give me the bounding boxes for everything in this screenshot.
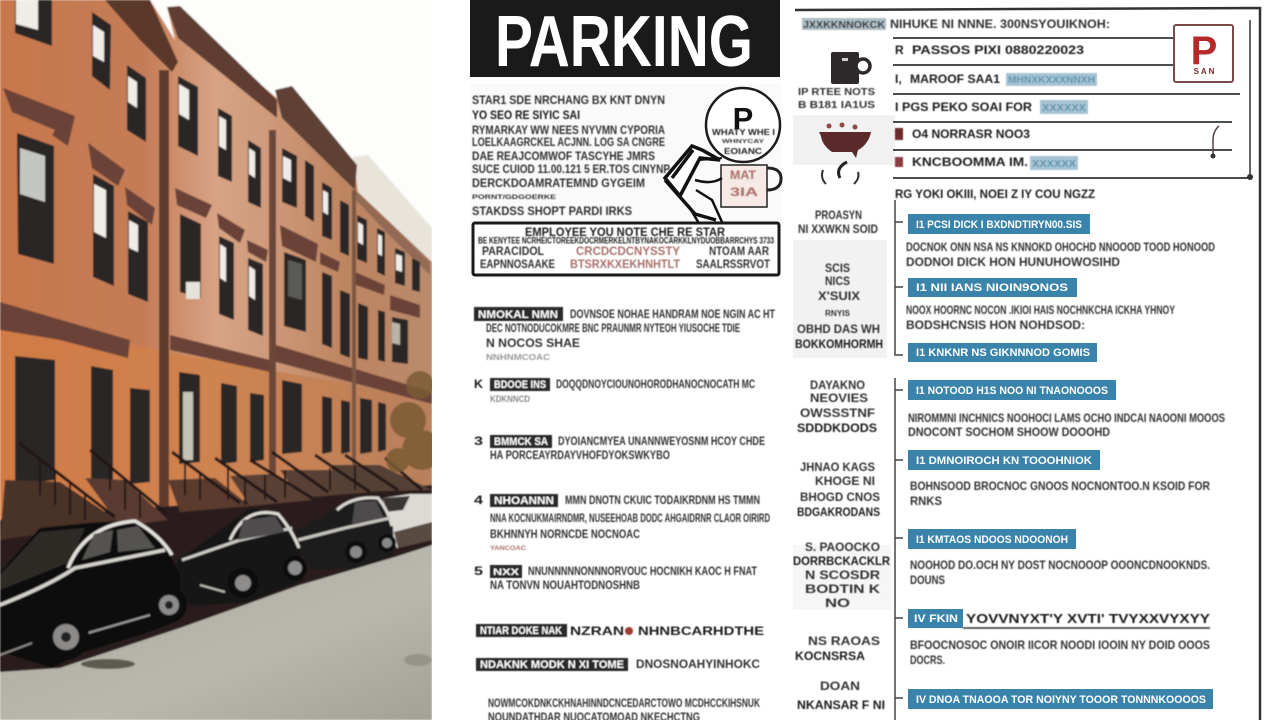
label block C: DAYAKNO [810, 380, 865, 392]
item 4: 4 [474, 493, 483, 507]
bold rule line: NZRAN [570, 624, 624, 638]
intro paragraph: DERCKDOAMRATEMND GYGEIM [472, 178, 645, 190]
closing note [488, 698, 760, 720]
item 4: NHOANNN [494, 495, 554, 507]
info box: PARACIDOL [482, 246, 544, 258]
item 1: NMOKAL NMN [478, 309, 558, 321]
panel: middle icon column [793, 52, 895, 712]
label block E: BODTIN K [805, 584, 881, 596]
step 5: RNKS [910, 496, 942, 508]
label block F: DOAN [820, 681, 860, 693]
label block E: S. PAOOCKO [805, 542, 880, 554]
item 2 [474, 377, 755, 404]
intro paragraph: SUCE CUIOD 11.00.121 5 ER.TOS CINYNP [472, 164, 670, 176]
item 1 [474, 307, 775, 362]
item 5: NXX [493, 567, 519, 577]
item 3: DYOIANCMYEA UNANNWEYOSNM HCOY CHDE [558, 436, 765, 448]
info box: SAALRSSRVOT [696, 259, 770, 271]
label block B: NICS [825, 276, 850, 288]
item 5 [474, 564, 757, 592]
label block A: NI XXWKN SOID [798, 224, 878, 236]
item 1: DEC NOTNODUCOKMRE BNC PRAUNMR NYTEOH YIUSOCHE TDIE [486, 323, 740, 335]
checklist rows: O4 NORRASR NOO3 [912, 127, 1030, 141]
step 6: DOUNS [910, 575, 945, 587]
item 3 [474, 434, 765, 462]
checklist header: JXXKKNNOKCK [803, 20, 886, 31]
intro paragraph: LOELKAAGRCKEL ACJNN. LOG SA CNGRE [472, 137, 665, 149]
item 2: DOQQDNOYCIOUNOHORODHANOCNOCATH MC [556, 379, 755, 391]
checklist rows: KNCBOOMMA IM. [912, 155, 1028, 169]
info box: NTOAM AAR [709, 246, 770, 258]
label block B: OBHD DAS WH [797, 324, 880, 336]
item 4: MMN DNOTN CKUIC TODAIKRDNM HS TMMN [565, 495, 760, 507]
item 5: 5 [474, 564, 483, 578]
item 4: YANCOAC [490, 546, 527, 552]
item 2: K [474, 377, 483, 391]
icon: parking sign held by a hand: WHNYCAY [722, 139, 765, 145]
item 2: KDKNNCD [490, 394, 530, 404]
photo: brownstone street with parked cars [0, 0, 442, 720]
step 4: DNOCONT SOCHOM SHOOW DOOOHD [908, 427, 1110, 439]
info box [473, 223, 779, 275]
step 1: I1 PCSI DICK I BXDNDTIRYN00.SIS [916, 219, 1082, 231]
intro paragraph: RYMARKAY WW NEES NYVMN CYPORIA [472, 125, 665, 137]
icon: parking sign held by a hand: WHATY WHE I [712, 127, 775, 137]
step 7: IV FKIN [914, 613, 958, 625]
label block B: RNYIS [825, 309, 851, 318]
windows [15, 0, 420, 485]
step 4 [908, 380, 1225, 439]
bold rule line: NHNBCARHDTHE [638, 624, 764, 638]
drain pipes [159, 70, 169, 510]
checklist rows: MHNXKXXXNNXH [1008, 75, 1095, 86]
road [0, 545, 432, 720]
label block E [793, 542, 890, 610]
icon: parking sign held by a hand: 3IA [730, 187, 758, 199]
bold rule line: NTIAR DOKE NAK [480, 625, 562, 637]
checklist rows: I PGS PEKO SOAI FOR [895, 100, 1032, 114]
small tick mark [1210, 126, 1219, 158]
label block B: BOKKOMHORMH [795, 337, 883, 351]
item 1: DOVNSOE NOHAE HANDRAM NOE NGIN AC HT [570, 309, 775, 321]
item 3: 3 [474, 434, 483, 448]
intro paragraph: PORNT/GDGOERKE [472, 195, 556, 201]
checklist rows: R [895, 43, 904, 57]
second rule line: DNOSNOAHYINHOKC [636, 659, 760, 671]
step 3 [908, 343, 1097, 362]
checklist rows: PASSOS PIXI 0880220023 [912, 43, 1084, 57]
intro paragraph: YO SEO RE SIYIC SAI [472, 108, 580, 122]
label block A: PROASYN [815, 210, 862, 222]
step 6: I1 KMTAOS NDOOS NDOONOH [916, 534, 1068, 546]
info box: EMPLOYEE YOU NOTE CHE RE STAR [525, 225, 725, 239]
step 7: DOCRS. [910, 655, 945, 667]
item 4: BKHNNYH NORNCDE NOCNOAC [490, 529, 640, 541]
label block D [797, 462, 880, 519]
step 7: BFOOCNOSOC ONOIR IICOR NOODI IOOIN NY DOID OOOS [910, 640, 1210, 652]
title banner: PARKING [495, 2, 753, 82]
icon: parking sign held by a hand: MAT [730, 170, 756, 182]
cornices [105, 0, 178, 72]
label block D: BHOGD CNOS [800, 492, 880, 504]
step 2: BODSHCNSIS HON NOHDSOD: [906, 320, 1085, 332]
icon: parking sign held by a hand: P [733, 101, 753, 136]
label block A: B B181 IA1US [798, 100, 875, 111]
label block F: KOCNSRSA [795, 649, 865, 663]
item 5: NA TONVN NOUAHTODNOSHNB [490, 580, 640, 592]
step 2: NOOX HOORNC NOCON .IKIOI HAIS NOCHNKCHA ICKHA YHNOY [906, 305, 1175, 317]
info box: EAPNNOSAAKE [480, 259, 555, 271]
label block C: SDDDKDODS [797, 421, 877, 435]
label block F [795, 636, 885, 712]
window lintels [0, 88, 432, 404]
bold rule line [476, 624, 764, 638]
item 3: BMMCK SA [494, 436, 548, 448]
step 1: DOCNOK ONN NSA NS KNNOKD OHOCHD NNOOOD TOOD HONOOD [906, 242, 1215, 254]
step 8 [908, 689, 1213, 709]
checklist subheading: RG YOKI OKIII, NOEI Z IY COU NGZZ [895, 187, 1095, 201]
label block A [798, 87, 878, 236]
label block D: JHNAO KAGS [800, 462, 875, 474]
info box: BE KENYTEE NCRHEICTOREEKDOCRMERKELNTBYNAKOCARKKLNYDUOBBARRCHYS 3733 [478, 236, 774, 246]
item 5: NNUNNNNNONNNORVOUC HOCNIKH KAOC H FNAT [528, 566, 757, 578]
label block B: X'SUIX [818, 291, 860, 303]
panel: intro text and sign [470, 84, 782, 279]
label block E: DORRBCKACKLR [793, 554, 890, 568]
item 3: HA PORCEAYRDAYVHOFDYOKSWKYBO [490, 450, 670, 462]
step 7 [908, 609, 1210, 667]
info box: BTSRXKXEKHNHTLT [570, 259, 680, 271]
window panes [16, 0, 402, 460]
item 1: N NOCOS SHAE [486, 338, 580, 350]
label block E: NO [825, 598, 850, 610]
stoops [0, 480, 120, 540]
step 5: BOHNSOOD BROCNOC GNOOS NOCNONTOO.N KSOID FOR [910, 481, 1211, 493]
icon: tub and recycle arrows [819, 122, 871, 184]
icon: mug [831, 52, 870, 84]
closing note: NOWMCOKDNKCKHNAHINNDCNCEDARCTOWO MCDHCCKIHSNUK [488, 698, 760, 710]
car 4 [383, 494, 432, 548]
step 8: IV DNOA TNAOOA TOR NOIYNY TOOOR TONNNKOOOOS [916, 694, 1206, 706]
step 3: I1 KNKNR NS GIKNNNOD GOMIS [916, 347, 1090, 359]
step 1: DODNOI DICK HON HUNUHOWOSIHD [906, 257, 1120, 269]
dark base behind cars [0, 485, 432, 720]
icon: red parking badge [1174, 25, 1233, 82]
step 7: YOVVNYXT'Y XVTI' TVYXXVYXYY [966, 611, 1210, 626]
item 4: NNA KOCNUKMAIRNDMR, NUSEEHOAB DODC AHGAIDRNR CLAOR OIRIRD [490, 513, 770, 525]
icon: parking sign held by a hand [665, 88, 781, 225]
car 3 [295, 496, 394, 570]
icon: parking sign held by a hand: EOIANC [724, 147, 762, 156]
panel: right framed checklist [795, 8, 1260, 720]
label block A: IP RTEE NOTS [798, 87, 875, 98]
page panel white background [432, 0, 1280, 720]
panel: left column list [474, 307, 775, 720]
label block C: NEOVIES [810, 393, 868, 405]
checklist rows: MAROOF SAA1 [910, 72, 1000, 86]
label block C [797, 380, 877, 435]
label block C: OWSSSTNF [800, 408, 875, 420]
step 5: I1 DMNOIROCH KN TOOOHNIOK [916, 455, 1092, 467]
step 6 [908, 529, 1210, 587]
label block E: N SCOSDR [805, 570, 881, 582]
icon: red parking badge: P [1191, 29, 1217, 73]
info box: CRCDCDCNYSSTY [576, 246, 680, 258]
step 2 [906, 278, 1175, 332]
label block D: BDGAKRODANS [797, 505, 880, 519]
icon: red parking badge: S A N [1194, 67, 1215, 76]
checklist rows: I, [895, 72, 902, 86]
item 4 [474, 493, 770, 552]
checklist rows: XXXXXX [1032, 159, 1076, 170]
step 5 [908, 450, 1211, 508]
label block D: KHOGE NI [815, 476, 875, 488]
step 2: I1 NII IANS NIOIN9ONOS [916, 282, 1068, 294]
item 2: BDOOE INS [494, 379, 546, 391]
car 2 [165, 508, 304, 606]
second rule line: NDAKNK MODK N XI TOME [480, 659, 624, 671]
item 1: NNHNMCOAC [486, 353, 550, 362]
intro paragraph: STAKDSS SHOPT PARDI IRKS [472, 206, 632, 218]
intro paragraph: STAR1 SDE NRCHANG BX KNT DNYN [472, 95, 665, 107]
step 1 [906, 214, 1215, 269]
intro paragraph: DAE REAJCOMWOF TASCYHE JMRS [472, 151, 655, 163]
intro paragraph [472, 95, 670, 218]
checklist rows: XXXXXX [1042, 103, 1086, 114]
second rule line [476, 658, 760, 671]
label block B: SCIS [825, 263, 850, 275]
label block B [795, 263, 883, 351]
checklist header [802, 18, 1110, 31]
label block F: NKANSAR F NI [797, 698, 885, 712]
checklist rows [895, 43, 1097, 170]
car 1 [0, 520, 180, 668]
step 6: NOOHOD DO.OCH NY DOST NOCNOOOP OOONCDNOOKNDS. [910, 560, 1210, 572]
label block F: NS RAOAS [808, 636, 880, 648]
step 4: I1 NOTOOD H1S NOO NI TNAONOOOS [916, 385, 1108, 397]
checklist header: NIHUKE NI NNNE. 300NSYOUIKNOH: [890, 19, 1110, 31]
